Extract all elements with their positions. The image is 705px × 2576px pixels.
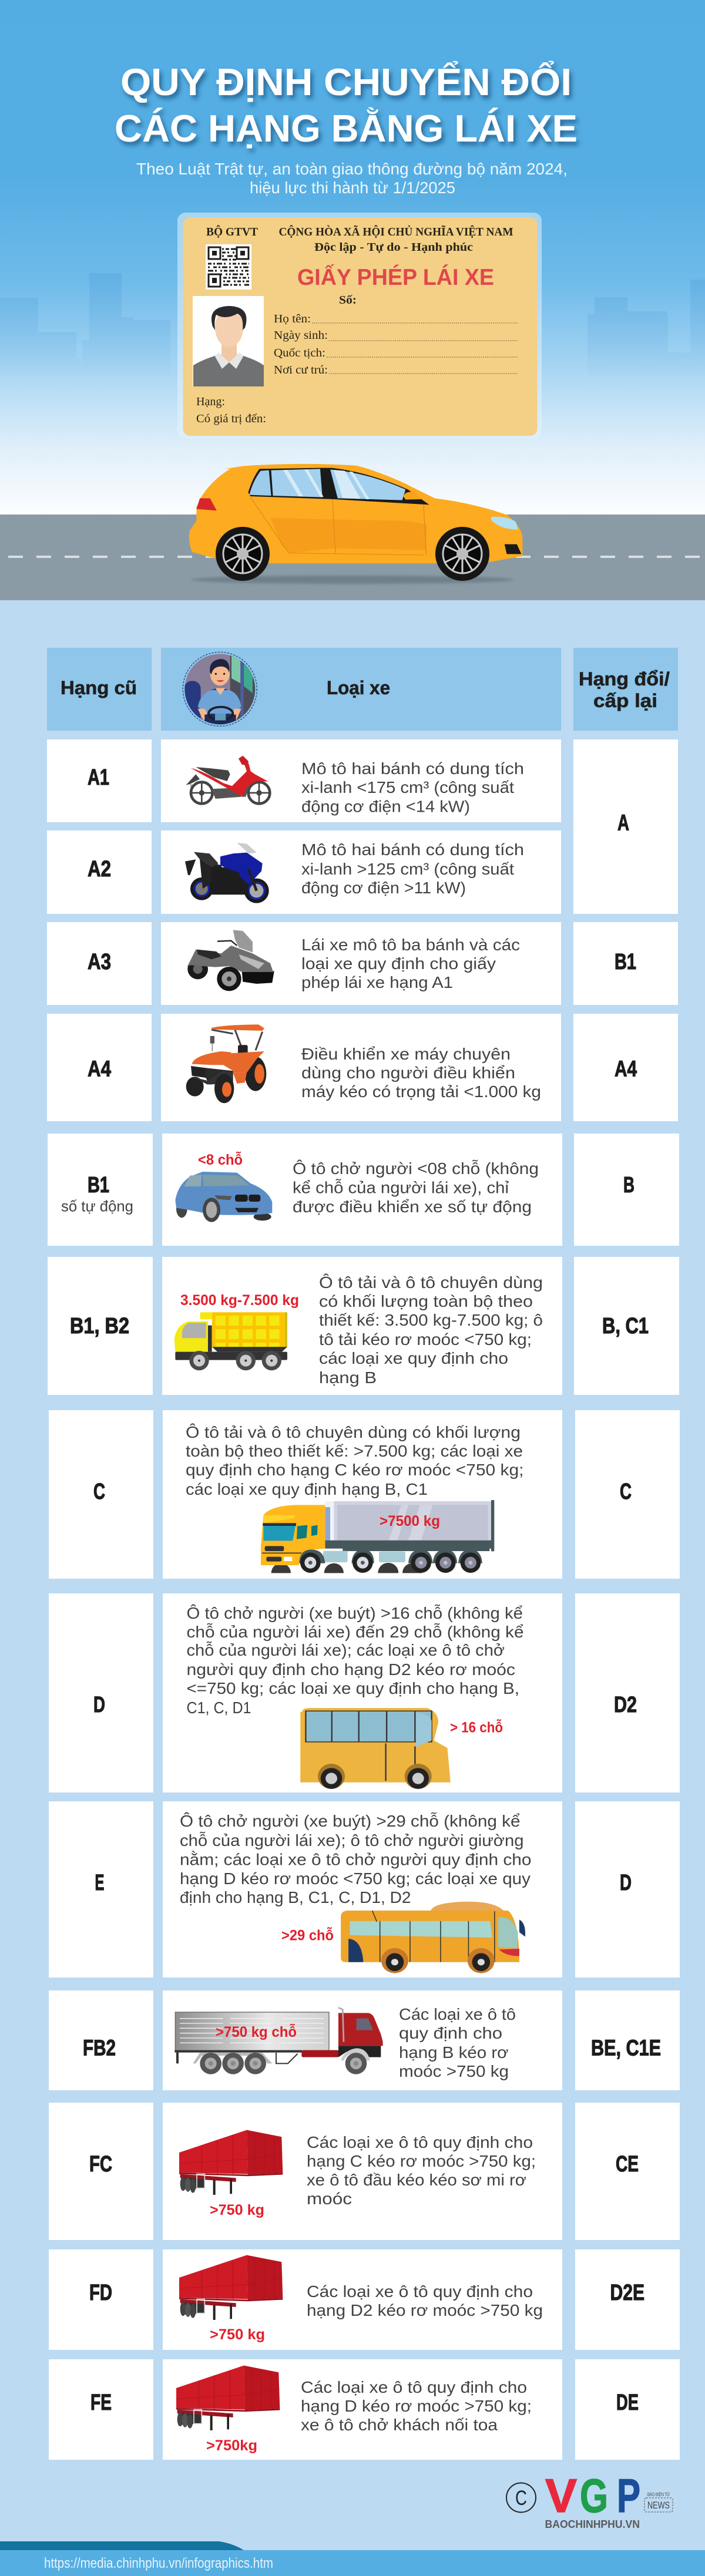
description D: <=750 kg; các loại xe quy định cho hạng B, (187, 1679, 519, 1697)
description A2: xi-lanh >125 cm³ (công suất (301, 860, 514, 878)
row B1, B2 (48, 1257, 679, 1395)
description B1: được điều khiển xe số tự động (293, 1198, 532, 1216)
rear wheel (216, 527, 270, 581)
icon: blue sedan with label: <8 chỗ (198, 1151, 243, 1168)
card: holder fields: Số: (339, 294, 357, 307)
new class DE: DE (616, 2390, 639, 2415)
table header (47, 648, 678, 731)
description A3 (301, 936, 520, 991)
icon: yellow truck with label: 3.500 kg-7.500 kg (180, 1292, 299, 1309)
row FE (49, 2359, 680, 2460)
new class C: C (620, 1479, 632, 1504)
row A4 (47, 1014, 678, 1121)
description FC: hạng C kéo rơ moóc >750 kg; (307, 2152, 536, 2170)
description FE (301, 2378, 532, 2434)
description FD: hạng D2 kéo rơ moóc >750 kg (307, 2301, 543, 2319)
new class D2E: D2E (610, 2281, 644, 2305)
description A1: xi-lanh <175 cm³ (công suất (301, 778, 514, 796)
description B1: Ô tô chở người <08 chỗ (không (293, 1159, 539, 1178)
row C (49, 1410, 680, 1579)
card: holder fields: Có giá trị đến: (196, 412, 266, 425)
old class FD: FD (89, 2281, 112, 2305)
description FC: Các loại xe ô tô quy định cho (307, 2133, 533, 2151)
new class B: B (623, 1173, 634, 1198)
description A4 (301, 1045, 541, 1101)
card: portrait photo (193, 296, 264, 386)
description A4: dùng cho người điều khiển (301, 1064, 515, 1082)
description E: nằm; các loại xe ô tô chở người quy định cho (180, 1850, 531, 1869)
merged new class A (573, 739, 678, 914)
description D: Ô tô chở người (xe buýt) >16 chỗ (không kể (187, 1604, 523, 1622)
driving licence card (177, 213, 542, 439)
description FC: moóc (307, 2190, 352, 2208)
description B1: kể chỗ của người lái xe), chỉ (293, 1178, 509, 1197)
logo: VGP News: BÁO ĐIỆN TỬ (647, 2492, 670, 2497)
description FD (307, 2282, 543, 2319)
row FC (49, 2103, 680, 2240)
description A2: Mô tô hai bánh có dung tích (301, 840, 524, 859)
new class D2: D2 (614, 1693, 637, 1717)
description D: chỗ của người lái xe) đến 29 chỗ (không kể (187, 1623, 524, 1641)
description FE: xe ô tô chở khách nối toa (301, 2416, 498, 2434)
subtitle: Theo Luật Trật tự, an toàn giao thông đường bộ năm 2024, (136, 160, 568, 178)
old class FC: FC (89, 2152, 112, 2177)
header: new class: cấp lại (593, 690, 657, 711)
card: national header (278, 224, 513, 254)
description A3: loại xe quy định cho giấy (301, 954, 496, 973)
merged new class A: A (617, 811, 629, 835)
logo: VGP News: G (580, 2470, 608, 2523)
logo: VGP News: NEWS (647, 2500, 670, 2511)
old class B1: số tự động (61, 1197, 133, 1215)
row FB2 (49, 1990, 680, 2090)
icon: red trailer with label (176, 2366, 280, 2454)
old class B1, B2: B1, B2 (70, 1314, 129, 1339)
icon: red trailer with label: >750kg (206, 2437, 257, 2454)
footer link: https://media.chinhphu.vn/infographics.htm (44, 2555, 273, 2571)
road (0, 514, 705, 600)
card: holder fields: Hạng: (196, 395, 225, 408)
description A3: phép lái xe hạng A1 (301, 973, 453, 991)
icon: coach with label (281, 1902, 525, 1973)
front wheel (435, 527, 489, 581)
description FB2: moóc >750 kg (399, 2062, 509, 2080)
logo: VGP News: C (515, 2487, 527, 2510)
description D: C1, C, D1 (187, 1699, 251, 1717)
icon: red trailer with label: >750 kg (210, 2202, 264, 2218)
description E (180, 1812, 531, 1906)
header: old class: Hạng cũ (61, 677, 137, 698)
description B1, B2: có khối lượng toàn bộ theo (319, 1292, 533, 1310)
icon: yellow bus with label (300, 1708, 503, 1789)
old class B1: B1 (88, 1173, 109, 1198)
description C: quy định cho hạng C kéo rơ moóc <750 kg; (186, 1461, 524, 1479)
description B1, B2: thiết kế: 3.500 kg-7.500 kg; ô (319, 1311, 543, 1329)
old class B1 (61, 1173, 133, 1215)
icon: articulated truck with label (261, 1500, 494, 1573)
title (115, 60, 578, 150)
logo: VGP News: V (545, 2470, 577, 2523)
icon: yellow truck with label (174, 1292, 299, 1370)
hero: sky and city skyline (0, 0, 705, 515)
logo: VGP News: BAOCHINHPHU.VN (545, 2518, 640, 2530)
description A2: động cơ điện >11 kW) (301, 879, 466, 897)
logo: VGP News: P (617, 2470, 640, 2523)
subtitle (136, 160, 568, 197)
old class D: D (93, 1693, 105, 1717)
icon: red trailer with label (179, 2130, 283, 2218)
row E (49, 1801, 680, 1978)
description FC (307, 2133, 536, 2208)
card: national header: Độc lập - Tự do - Hạnh phúc (314, 241, 473, 254)
row D (49, 1593, 680, 1793)
card: holder fields (196, 294, 518, 425)
new class CE: CE (616, 2152, 639, 2177)
old class A2: A2 (88, 857, 111, 882)
new class B, C1: B, C1 (602, 1314, 649, 1339)
subtitle: hiệu lực thi hành từ 1/1/2025 (250, 179, 455, 197)
description C: toàn bộ theo thiết kế: >7.500 kg; các loại xe (186, 1442, 523, 1460)
icon: three-wheel motorbike (187, 930, 274, 991)
card: issuing authority: BỘ GTVT (206, 225, 258, 238)
description D (187, 1604, 524, 1717)
footer bar (0, 2541, 705, 2576)
description FB2: Các loại xe ô tô (399, 2005, 516, 2023)
description E: chỗ của người lái xe); ô tô chở người giường (180, 1831, 524, 1849)
icon: box truck with label: >750 kg chỗ (216, 2023, 297, 2040)
old class C: C (93, 1479, 105, 1504)
description E: định cho hạng B, C1, C, D1, D2 (180, 1888, 411, 1906)
header: vehicle type: Loại xe (327, 677, 390, 698)
title: QUY ĐỊNH CHUYỂN ĐỔI (120, 60, 572, 103)
description A3: Lái xe mô tô ba bánh và các (301, 936, 520, 954)
description FB2: hạng B kéo rơ (399, 2043, 509, 2062)
card: holder fields: Quốc tịch: (274, 347, 325, 359)
row A2 (47, 830, 561, 914)
row A3 (47, 922, 678, 1005)
description E: hạng D kéo rơ moóc <750 kg; các loại xe quy (180, 1869, 531, 1888)
old class E: E (95, 1871, 105, 1895)
description B1, B2: hạng B (319, 1368, 377, 1387)
icon: coach with label: >29 chỗ (281, 1926, 334, 1944)
description FC: xe ô tô đầu kéo kéo sơ mi rơ (307, 2171, 526, 2189)
card: holder fields: Nơi cư trú: (274, 364, 328, 376)
description B1, B2: các loại xe quy định cho (319, 1349, 508, 1367)
icon: bus driver (183, 652, 257, 727)
icon: red motorbike (186, 756, 270, 803)
old class A1: A1 (88, 765, 109, 790)
description D: người quy định cho hạng D2 kéo rơ moóc (187, 1660, 515, 1679)
icon: box truck with label (174, 2007, 383, 2074)
old class A3: A3 (88, 950, 111, 974)
icon: orange tractor (186, 1024, 266, 1103)
description A1: động cơ điện <14 kW) (301, 798, 470, 815)
row A1 (47, 739, 561, 822)
description A4: máy kéo có trọng tải <1.000 kg (301, 1082, 541, 1101)
old class FB2: FB2 (83, 2036, 116, 2060)
description FB2 (399, 2005, 516, 2080)
card: heading: GIẤY PHÉP LÁI XE (297, 264, 494, 290)
description C (186, 1423, 524, 1498)
card: QR code (206, 244, 251, 290)
icon: orange car (189, 464, 522, 581)
description E: Ô tô chở người (xe buýt) >29 chỗ (không kể (180, 1812, 521, 1830)
row FD (49, 2249, 680, 2350)
row B1 automatic (48, 1134, 679, 1246)
description B1 (293, 1159, 539, 1216)
description FD: Các loại xe ô tô quy định cho (307, 2282, 533, 2301)
new class B1: B1 (615, 950, 636, 974)
icon: red trailer with label (179, 2255, 283, 2343)
icon: articulated truck with label: >7500 kg (380, 1513, 440, 1529)
description B1, B2 (319, 1273, 543, 1387)
old class FE: FE (90, 2390, 112, 2415)
description B1, B2: tô tải kéo rơ moóc <750 kg; (319, 1330, 532, 1348)
card: holder fields: Ngày sinh: (274, 329, 328, 342)
description A2 (301, 840, 524, 897)
description FE: Các loại xe ô tô quy định cho (301, 2378, 527, 2396)
old class A4: A4 (88, 1057, 111, 1082)
new class BE, C1E: BE, C1E (591, 2036, 661, 2060)
header: new class: Hạng đổi/ (579, 668, 670, 690)
card: holder fields: Họ tên: (274, 312, 311, 325)
title: CÁC HẠNG BẰNG LÁI XE (115, 107, 578, 150)
description D: chỗ của người lái xe); các loại xe ô tô chở (187, 1641, 505, 1659)
description A4: Điều khiển xe máy chuyên (301, 1045, 511, 1063)
icon: blue sedan with label (175, 1151, 272, 1222)
description A1 (301, 759, 524, 815)
icon: blue sport motorbike (185, 843, 267, 902)
new class D: D (620, 1871, 632, 1895)
description A1: Mô tô hai bánh có dung tích (301, 759, 524, 778)
description B1, B2: Ô tô tải và ô tô chuyên dùng (319, 1273, 543, 1292)
logo: VGP News (506, 2470, 673, 2530)
header: new class (579, 668, 670, 711)
icon: yellow bus with label: > 16 chỗ (450, 1719, 503, 1736)
description FE: hạng D kéo rơ moóc >750 kg; (301, 2397, 532, 2415)
description FB2: quy định cho (399, 2024, 502, 2042)
icon: red trailer with label: >750 kg (210, 2326, 265, 2343)
description C: các loại xe quy định hạng B, C1 (186, 1480, 428, 1498)
description C: Ô tô tải và ô tô chuyên dùng có khối lượng (186, 1423, 521, 1441)
card: national header: CỘNG HÒA XÃ HỘI CHỦ NGHĨA VIỆT NAM (278, 224, 513, 238)
new class A4: A4 (615, 1057, 637, 1082)
